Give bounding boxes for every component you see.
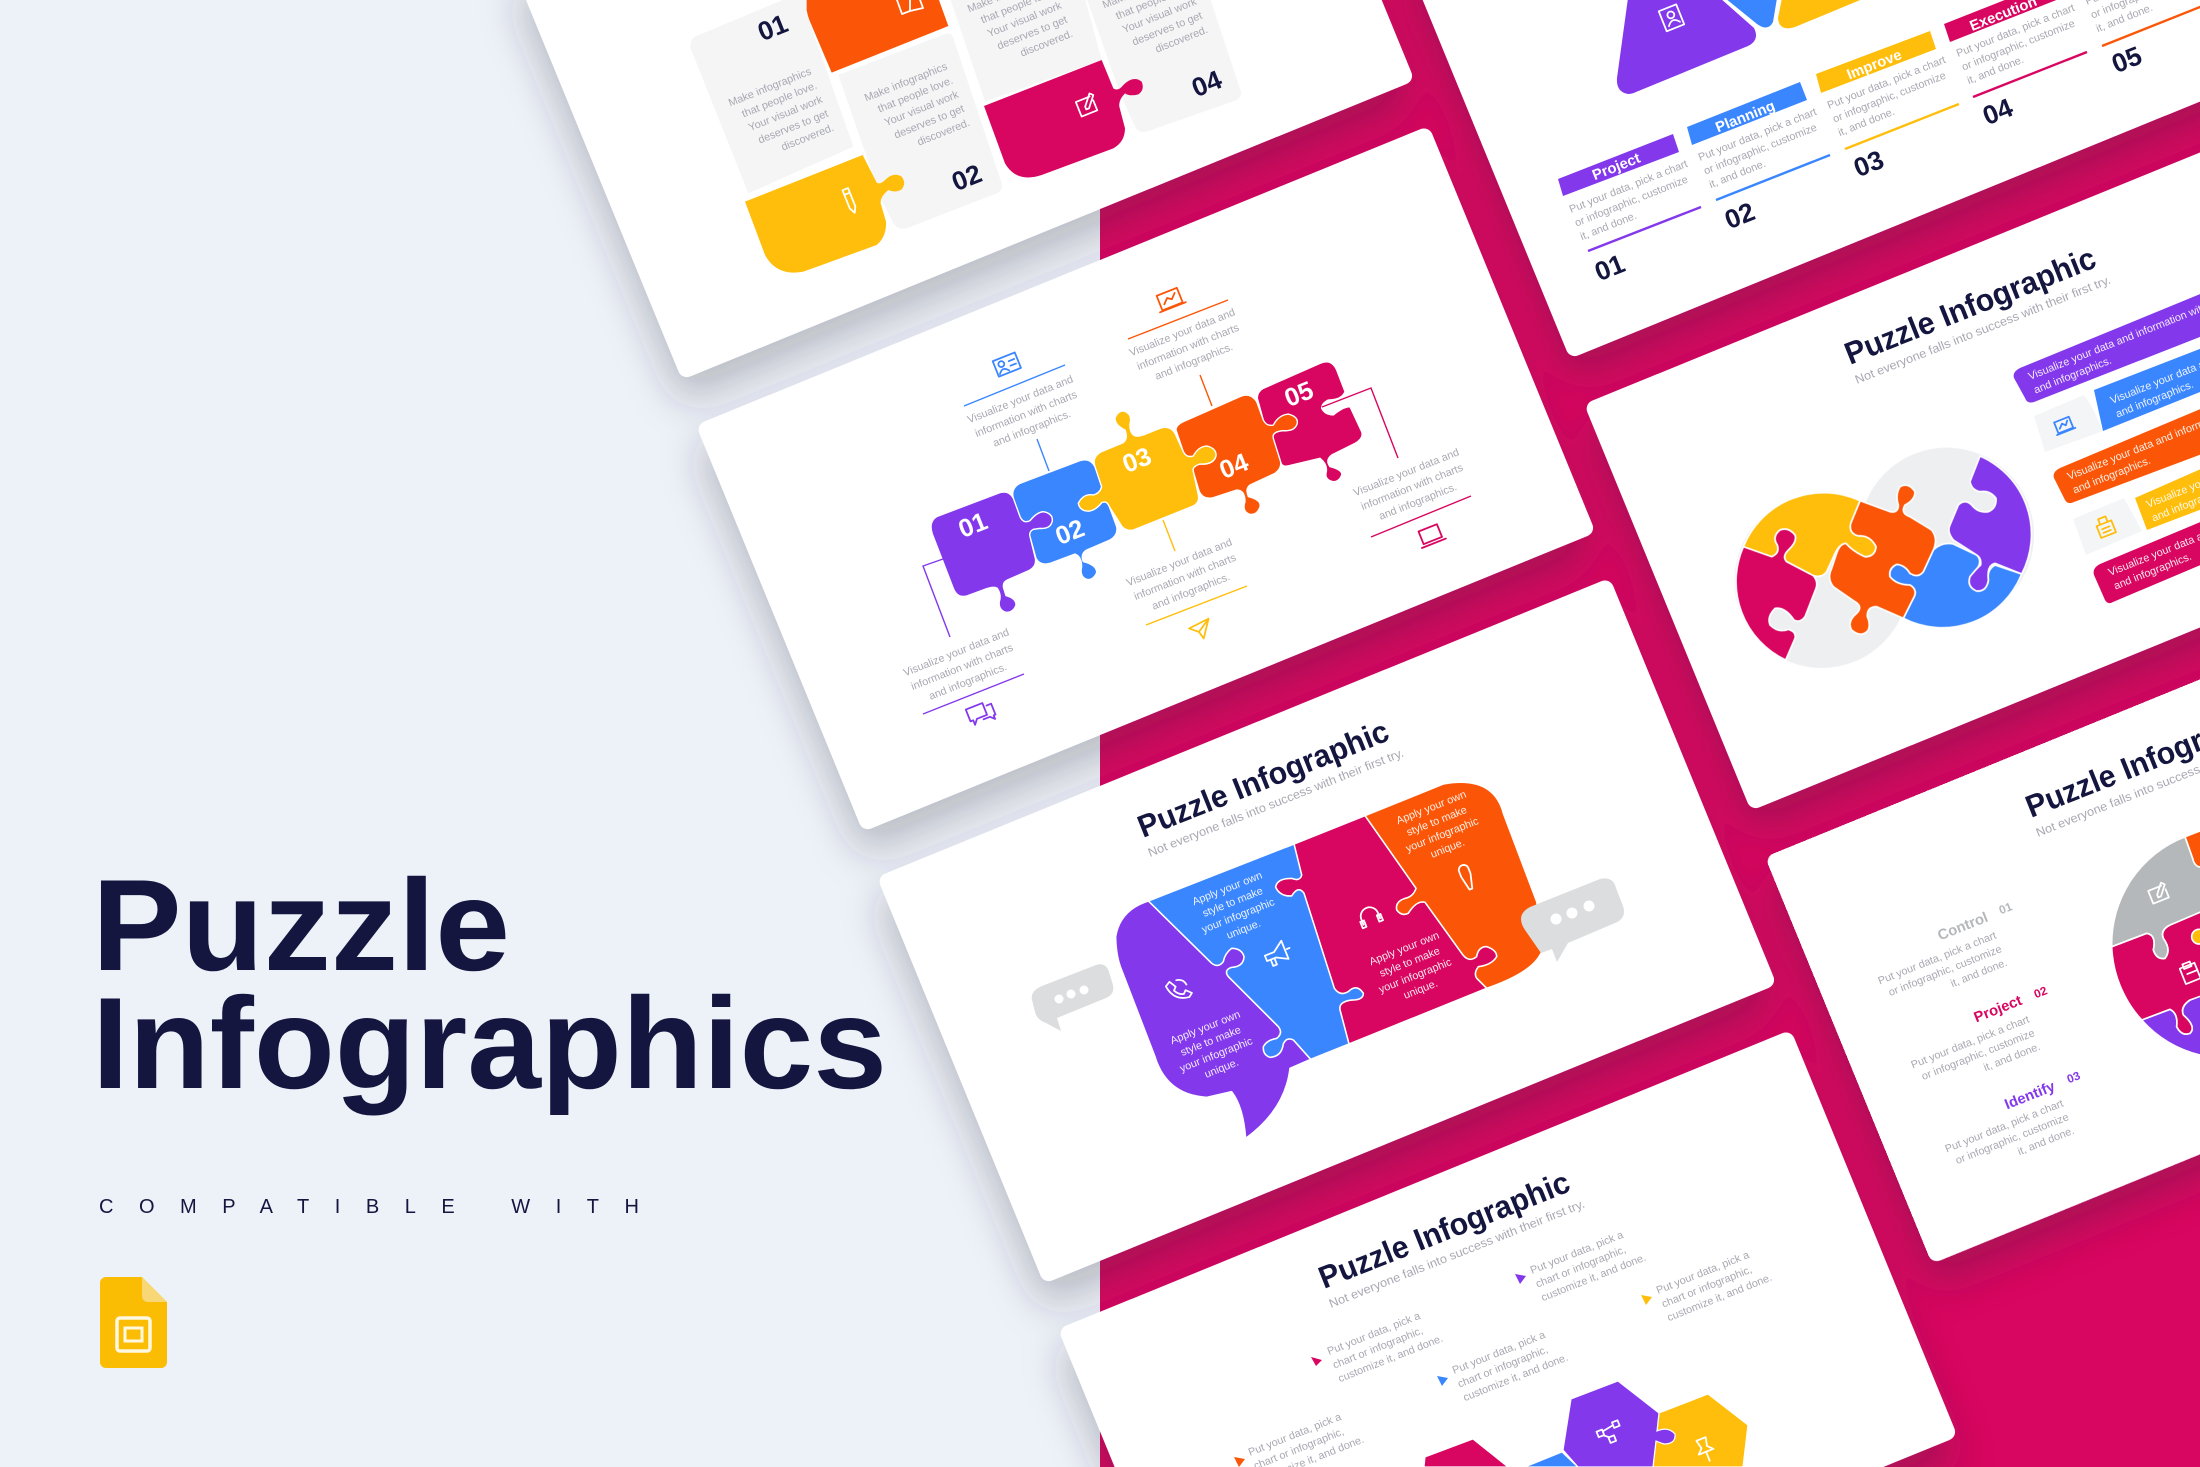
step label names: Improve [1845,47,1904,83]
main title [92,852,887,1116]
icon: chat bubbles [966,700,997,728]
compatible with label: COMPATIBLE WITH [99,1196,639,1218]
panel: slide A numbered tiles [690,0,1241,273]
grey icon tile two [2073,498,2142,555]
panel: slide D hexagon puzzle [1234,1165,1774,1467]
right grey chat bubble [1521,878,1624,962]
tile text blocks: discovered. [1019,28,1075,60]
icon: pencil [843,188,857,214]
step text blocks: or infographic, customize [1831,70,1948,125]
puzzle numbers: 02 [1052,514,1089,551]
slide title: Puzzle Infographic [1133,714,1394,844]
tiles and puzzle pieces [690,0,1241,273]
item: control: it, and done. [1949,957,2009,990]
step text blocks: or infographic, customize [1702,122,1819,177]
grey icon tile one [2034,395,2103,452]
callout text blocks: information with charts [973,389,1079,440]
callout text blocks: information with charts [1132,552,1238,603]
item: project: Put your data, pick a chart [1909,1014,2031,1071]
callout text blocks: Visualize your data and [902,627,1011,679]
callout text blocks: Visualize your data and [1128,307,1237,359]
background: magenta right side [1100,0,2200,1467]
piece text blocks: your infographic [1178,1035,1255,1075]
tile text blocks: Your visual work [747,94,825,134]
icon: phone [1165,976,1193,1004]
step text blocks: it, and done. [1579,210,1639,243]
bullet text blocks: customize it, and done. [1462,1352,1570,1404]
icon: microphone [1457,863,1476,891]
tile text blocks: Your visual work [986,0,1064,40]
callout text blocks: information with charts [909,642,1015,693]
panel: slide G circle puzzle [1876,694,2200,1183]
step rules [1588,3,2200,251]
item: control: Control [1936,910,1990,944]
icon: fax [2094,515,2116,538]
panel: slide B puzzle row [902,287,1473,728]
piece text blocks: Apply your own [1395,789,1468,827]
slide title: Puzzle Infographic [1314,1165,1575,1295]
item: identify: or infographic, customize [1954,1111,2071,1167]
puzzle numbers: 01 [955,507,992,544]
step label names: Planning [1713,98,1778,136]
piece text blocks: style to make [1378,945,1442,980]
item: control: or infographic, customize [1887,943,2004,999]
tile text blocks: deserves to get [757,108,830,146]
icon: chart [2052,416,2075,435]
piece text blocks: unique. [1402,978,1440,1002]
icon: headphones [1356,904,1383,928]
tile numbers [753,8,1226,197]
bullet text blocks: customize it, and done. [1666,1272,1774,1324]
item: identify: Identify [2003,1079,2058,1113]
icon: chart board [1154,287,1186,312]
tile text blocks: deserves to get [1131,10,1204,48]
step text blocks: or infographic, customize [1573,174,1690,229]
bullet text blocks [1247,1224,1774,1467]
panel: slide C speech bubble puzzle [1032,714,1624,1138]
callout text blocks: and infographics. [991,408,1073,450]
icon: book [897,0,923,14]
step text blocks: or infographic, customize [1960,18,2077,73]
piece text blocks: your infographic [1404,815,1481,855]
item: project: Project [1972,993,2025,1026]
tile text blocks [727,0,1210,166]
item: project: it, and done. [1982,1041,2042,1074]
piece text blocks: your infographic [1200,896,1277,936]
piece text blocks: unique. [1225,918,1263,942]
icon: megaphone [1262,939,1294,967]
bar text blocks: and infographics. [2112,551,2193,592]
bullet text blocks: chart or infographic, [1331,1325,1425,1371]
step text blocks: it, and done. [1837,106,1897,139]
connector lines and rules [923,300,1471,714]
step text blocks: Put your data, pick a chart [1568,158,1689,216]
callout text blocks: and infographics. [1150,571,1232,613]
panel: slide F infinity puzzle [1734,241,2200,668]
piece text blocks: style to make [1405,804,1469,839]
step text blocks: it, and done. [1708,158,1768,191]
step label bars [1558,0,2064,196]
piece text blocks: style to make [1201,885,1265,920]
tile text blocks: discovered. [1154,24,1210,56]
panel: slide E process steps [1558,0,2200,287]
slide subtitle: Not everyone falls into success with their first try. [1146,746,1406,860]
piece text blocks: unique. [1429,837,1467,861]
bullet text blocks: Put your data, pick a [1529,1229,1625,1277]
bullet text blocks: customize it, and done. [1337,1333,1445,1385]
tile text blocks: Make infographics [727,65,814,109]
slide card backgrounds [515,0,2200,1467]
puzzle numbers [955,376,1318,551]
bar text blocks: and infographics. [2032,355,2113,396]
infinity puzzle pieces [1734,448,2034,668]
piece text blocks: Apply your own [1368,930,1441,968]
callout text blocks: and infographics. [1153,341,1235,383]
bullet text blocks: Put your data, pick a [1655,1249,1751,1297]
pink bar [2094,518,2200,603]
yellow bar [2135,465,2200,530]
bar text blocks: and infographics. [2114,379,2195,420]
step text blocks: it, and done. [1966,54,2026,87]
callout text blocks: information with charts [1135,322,1241,373]
item: identify: 03 [2065,1069,2083,1086]
speech bubble pieces [1116,782,1542,1138]
triangle puzzle pieces [1617,0,1865,94]
slide subtitle: Not everyone falls into success with their first try. [1327,1197,1587,1311]
tile numbers: 02 [947,158,986,197]
item: control [1876,900,2015,1015]
step label names [1590,0,2039,184]
step numbers [1590,40,2146,287]
slide title: Puzzle Infographic [1840,241,2101,371]
tile text blocks: discovered. [780,122,836,154]
tile text blocks: discovered. [916,117,972,149]
puzzle numbers: 03 [1119,442,1156,479]
tile text blocks: that people love. [876,75,955,115]
icon: contact card [993,352,1021,377]
step numbers: 01 [1590,248,1629,287]
icon: laptop [1416,523,1446,548]
piece text blocks: Apply your own [1191,870,1264,908]
icon: address book [1659,4,1684,31]
bullet text blocks: chart or infographic, [1660,1264,1754,1310]
item: project: 02 [2032,984,2050,1001]
item: control: 01 [1997,900,2015,917]
tile text blocks: that people love. [740,80,819,120]
orange bar [2054,405,2200,503]
icon: edit [2147,882,2170,904]
bar text blocks [2027,301,2200,592]
callout text blocks: information with charts [1359,462,1465,513]
bullet text blocks: chart or infographic, [1534,1244,1628,1290]
callout text blocks [902,307,1473,708]
tile text blocks: Your visual work [883,89,961,129]
tile numbers: 04 [1187,64,1226,103]
tile text blocks: Make infographics [863,60,950,104]
step label names: Project [1590,151,1643,184]
step numbers: 03 [1849,144,1888,183]
hexagon pieces [1424,1381,1748,1467]
step text blocks: Put your data, pick a chart [1697,106,1818,164]
icon: network nodes [1595,1420,1624,1446]
bullet triangles [1234,1274,1652,1467]
step numbers: 02 [1720,196,1759,235]
bullet text blocks: Put your data, pick a [1451,1329,1547,1377]
item: control: Put your data, pick a chart [1876,930,1998,987]
callout text blocks: and infographics. [927,661,1009,703]
icon: google slides [100,1277,167,1368]
callout text blocks: Visualize your data and [1125,537,1234,589]
tile text blocks: deserves to get [996,14,1069,52]
piece text blocks [1167,788,1486,1088]
piece text blocks: style to make [1179,1024,1243,1059]
tile numbers: 01 [753,8,792,47]
step text blocks: Put your data, pick a chart [1826,54,1947,112]
left grey chat bubble [1032,964,1113,1031]
bullet text blocks: Put your data, pick a [1326,1310,1422,1358]
slide subtitle: Not everyone falls into success with their first try. [1853,273,2113,387]
bullet text blocks: Put your data, pick a [1247,1411,1343,1459]
callout text blocks: Visualize your data and [966,374,1075,426]
icon: push pin [1694,1436,1717,1464]
item: identify: Put your data, pick a chart [1943,1098,2065,1155]
step numbers: 05 [2107,40,2146,79]
item: identify [1943,1069,2083,1183]
item: project [1909,984,2050,1099]
circle puzzle pieces [2112,828,2200,1057]
step numbers: 04 [1978,92,2017,131]
puzzle numbers: 05 [1281,376,1318,413]
item: identify: it, and done. [2016,1125,2076,1158]
callout text blocks: and infographics. [1377,481,1459,523]
purple bar [2014,290,2200,402]
main title: Infographics [92,970,887,1116]
tile text blocks: deserves to get [893,103,966,141]
puzzle numbers: 04 [1216,448,1253,485]
blue bar [2094,345,2200,431]
step text blocks: it, and done. [2095,2,2155,35]
icon: edit [1075,92,1099,117]
piece text blocks: your infographic [1377,956,1454,996]
item: project: or infographic, customize [1920,1027,2037,1083]
piece text blocks: Apply your own [1169,1009,1242,1047]
callout text blocks: Visualize your data and [1352,447,1461,499]
bullet text blocks: chart or infographic, [1456,1344,1550,1390]
icon: clipboard [2179,960,2200,984]
piece text blocks: unique. [1203,1057,1241,1081]
puzzle pieces row [931,362,1362,612]
step text blocks [1568,0,2200,243]
main title: Puzzle [92,852,510,998]
bullet text blocks: customize it, and done. [1540,1252,1648,1304]
step text blocks: Put your data, pick a chart [1955,2,2076,60]
bar text blocks: and infographics. [2071,455,2152,496]
icon: paper plane [1188,619,1215,642]
